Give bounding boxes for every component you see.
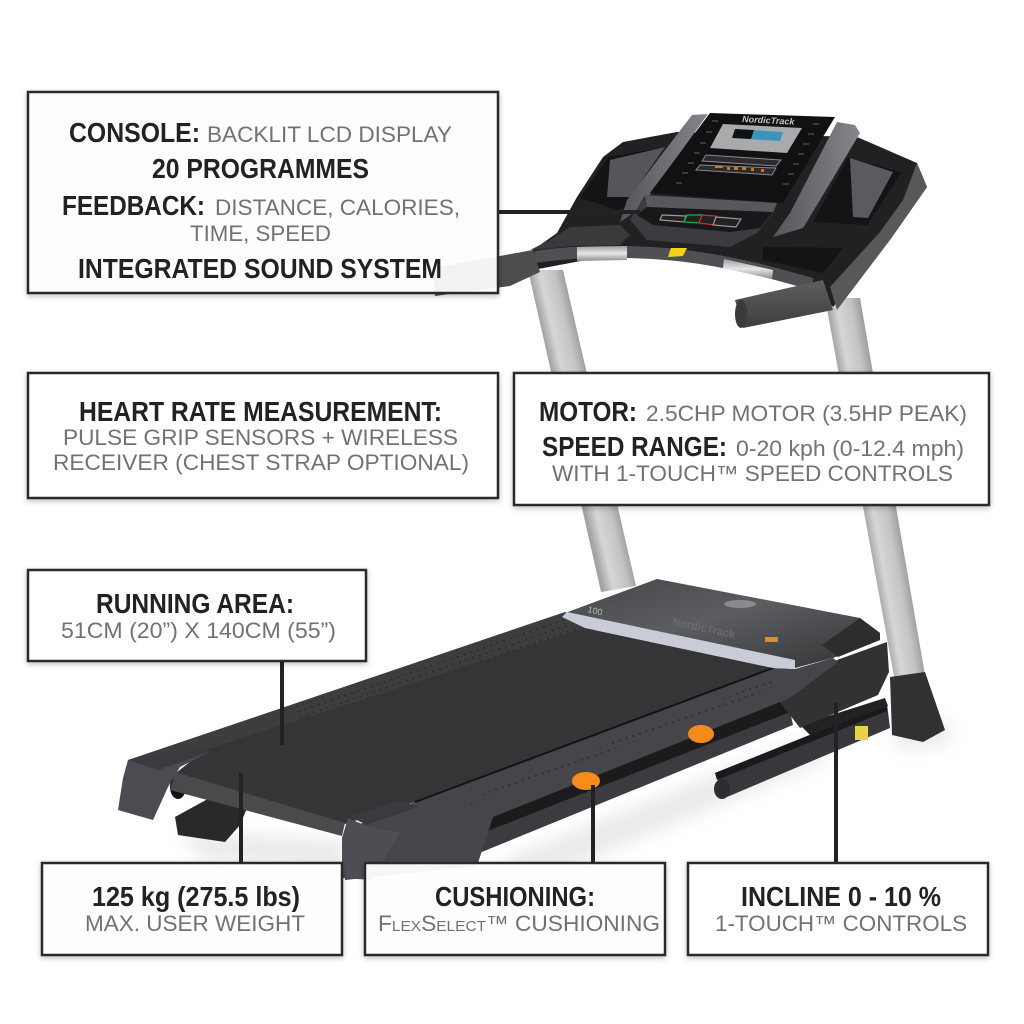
- cushioning pad rear: [688, 725, 714, 743]
- lower keypad: [637, 207, 773, 232]
- right end cap: [342, 800, 418, 880]
- console heading and text: INTEGRATED SOUND SYSTEM: [78, 253, 442, 284]
- panel: heart rate: [28, 373, 498, 498]
- console shell: [530, 113, 927, 310]
- lower keypad bevel: [630, 195, 777, 247]
- running belt: [172, 628, 773, 824]
- side strip right: [773, 122, 860, 237]
- left end cap: [118, 747, 210, 820]
- handlebar crossbar: [535, 246, 812, 284]
- console heading and text: DISTANCE, CALORIES,: [215, 195, 460, 220]
- keypad lip: [645, 195, 777, 213]
- cushioning text: [378, 881, 660, 936]
- console heading and text: [62, 117, 460, 284]
- hood silver strip: [562, 612, 795, 669]
- speed and start stop keys: [660, 215, 741, 227]
- incline text: [715, 881, 967, 936]
- running area text: [61, 588, 336, 643]
- hood model marks: [587, 600, 778, 642]
- console heading and text: CONSOLE:: [69, 117, 200, 148]
- hood right face: [822, 618, 880, 657]
- cushioning pad front: [572, 772, 600, 790]
- right rail perforation: [430, 680, 785, 815]
- left tray: [580, 147, 665, 210]
- silver grip right: [723, 259, 773, 279]
- left grip: [433, 250, 540, 296]
- wheel: [714, 779, 730, 799]
- warning label: [855, 726, 868, 740]
- outer arm: [830, 163, 927, 310]
- panel: console: [28, 92, 498, 293]
- console heading and text: FEEDBACK:: [62, 190, 205, 221]
- orange program icons: [715, 166, 764, 172]
- right tray: [813, 157, 902, 225]
- console heading and text: BACKLIT LCD DISPLAY: [207, 122, 452, 147]
- right rail: [345, 658, 838, 880]
- motor text: 2.5CHP MOTOR (3.5HP PEAK): [646, 401, 967, 426]
- lower frame rail: [440, 711, 793, 869]
- yellow safety key: [668, 248, 687, 257]
- brand name: NordicTrack: [742, 114, 796, 127]
- side strip left: [620, 114, 708, 222]
- silver grip left: [577, 246, 627, 261]
- left tray inner: [607, 147, 665, 197]
- left rail perforation: [290, 618, 585, 720]
- panel: running area: [28, 570, 366, 661]
- console heading and text: TIME, SPEED: [190, 221, 331, 246]
- belt front roller: [170, 772, 345, 836]
- program key rows: [696, 155, 781, 175]
- LCD bezel: [710, 124, 802, 153]
- opening between rail and frame: [470, 692, 790, 838]
- front deck foot: [175, 795, 247, 842]
- panel: motor and speed: [514, 373, 989, 505]
- connector: running area: [280, 661, 284, 745]
- floor shadows: [180, 720, 950, 880]
- base stabilizer bar: [714, 698, 890, 799]
- motor text: [539, 396, 967, 486]
- belt edge seam: [415, 668, 773, 802]
- weight text: [85, 881, 305, 936]
- left rail: [128, 612, 600, 760]
- panel: max user weight: [42, 863, 342, 955]
- incline text: 1-TOUCH™ CONTROLS: [715, 911, 967, 936]
- right tray inner: [850, 158, 893, 218]
- left key column: [676, 120, 718, 184]
- motor text: WITH 1-TOUCH™ SPEED CONTROLS: [552, 461, 953, 486]
- panel: cushioning: [365, 863, 665, 955]
- right key column: [783, 123, 819, 185]
- motor text: MOTOR:: [539, 396, 637, 427]
- connector: console: [498, 210, 640, 214]
- heart rate text: RECEIVER (CHEST STRAP OPTIONAL): [53, 450, 469, 475]
- motor text: SPEED RANGE:: [542, 431, 727, 462]
- weight text: 125 kg (275.5 lbs): [92, 881, 300, 912]
- cushioning text: CUSHIONING:: [435, 881, 595, 912]
- left arm recess: [530, 225, 630, 250]
- weight text: MAX. USER WEIGHT: [85, 911, 305, 936]
- right lower block: [763, 247, 843, 273]
- motor text: 0-20 kph (0-12.4 mph): [736, 436, 964, 461]
- front upright pole: [528, 270, 636, 592]
- rear upright pole: [825, 298, 925, 682]
- upright foot: [890, 672, 945, 742]
- panel: incline: [688, 863, 988, 955]
- incline text: INCLINE 0 - 10 %: [741, 881, 941, 912]
- hood logo: NordicTrack: [671, 616, 737, 641]
- hood model marks: 100: [587, 604, 604, 618]
- heart rate text: HEART RATE MEASUREMENT:: [79, 396, 442, 427]
- roller hollow: [170, 775, 186, 799]
- connector: cushioning: [591, 785, 595, 863]
- cushioning text: FlexSelect™ CUSHIONING: [378, 911, 660, 936]
- motor housing side: [770, 642, 889, 728]
- running area text: 51CM (20”) X 140CM (55”): [61, 618, 336, 643]
- right grip: [735, 280, 833, 328]
- treadmill illustration: [118, 113, 950, 880]
- display panel: [650, 113, 835, 203]
- LCD screen: [732, 129, 783, 141]
- connector: incline: [834, 703, 838, 863]
- heart rate text: [53, 396, 469, 475]
- LCD dark area: [732, 129, 754, 139]
- motor hood: [562, 579, 880, 669]
- connector: max user weight: [239, 773, 243, 863]
- heart rate text: PULSE GRIP SENSORS + WIRELESS: [63, 425, 458, 450]
- running area text: RUNNING AREA:: [96, 588, 294, 619]
- console heading and text: 20 PROGRAMMES: [152, 153, 369, 184]
